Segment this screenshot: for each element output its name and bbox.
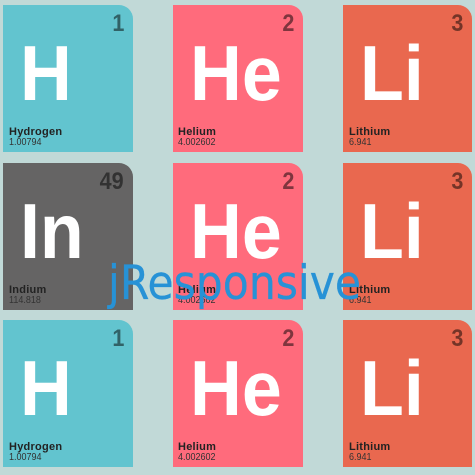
tile: Helium row 1: He bbox=[190, 29, 282, 117]
tile: Helium row 1: 4.002602 bbox=[178, 137, 216, 148]
tile: Hydrogen row 1: H bbox=[20, 29, 72, 117]
tile: Hydrogen row 3: H bbox=[20, 344, 72, 432]
tile: Lithium row 3 bbox=[343, 320, 472, 467]
tile: Helium row 2 bbox=[173, 163, 303, 310]
tile: Helium row 2: Helium bbox=[178, 284, 216, 296]
tile: Lithium row 3: Li bbox=[360, 344, 424, 432]
tile: Lithium row 1 bbox=[343, 5, 472, 152]
tile: Helium row 2: 4.002602 bbox=[178, 295, 216, 306]
tile: Helium row 1: Helium bbox=[178, 126, 216, 138]
tile: Hydrogen row 3 bbox=[3, 320, 133, 467]
tile: Lithium row 2: Li bbox=[360, 187, 424, 275]
tile: Lithium row 1: Li bbox=[360, 29, 424, 117]
tile: Hydrogen row 1: Hydrogen bbox=[9, 126, 62, 138]
tile: Helium row 3: He bbox=[190, 344, 282, 432]
tile: Hydrogen row 3: 1.00794 bbox=[9, 452, 42, 463]
tile: Indium row 2: Indium bbox=[9, 284, 47, 296]
tile: Helium row 2: 2 bbox=[282, 168, 294, 195]
tile: Hydrogen row 1: 1.00794 bbox=[9, 137, 42, 148]
tile: Lithium row 2: 6.941 bbox=[349, 295, 372, 306]
tile: Indium row 2: 49 bbox=[100, 168, 124, 195]
tile: Lithium row 1: Lithium bbox=[349, 126, 390, 138]
tile: Helium row 1: 2 bbox=[282, 10, 294, 37]
tile: Hydrogen row 1: 1 bbox=[112, 10, 124, 37]
tile: Helium row 3: 4.002602 bbox=[178, 452, 216, 463]
tile: Lithium row 3: 3 bbox=[451, 325, 463, 352]
tile: Helium row 2: He bbox=[190, 187, 282, 275]
tile: Lithium row 2: Lithium bbox=[349, 284, 390, 296]
tile: Indium row 2 bbox=[3, 163, 133, 310]
tile: Hydrogen row 3: 1 bbox=[112, 325, 124, 352]
tile: Helium row 3: Helium bbox=[178, 441, 216, 453]
tile: Lithium row 2: 3 bbox=[451, 168, 463, 195]
tile: Helium row 1 bbox=[173, 5, 303, 152]
tile: Hydrogen row 1 bbox=[3, 5, 133, 152]
tile: Helium row 3 bbox=[173, 320, 303, 467]
tile: Lithium row 1: 6.941 bbox=[349, 137, 372, 148]
tile: Hydrogen row 3: Hydrogen bbox=[9, 441, 62, 453]
title: jResponsive: jResponsive bbox=[108, 256, 361, 311]
tile: Lithium row 3: 6.941 bbox=[349, 452, 372, 463]
tile: Lithium row 3: Lithium bbox=[349, 441, 390, 453]
tile: Indium row 2: In bbox=[20, 187, 84, 275]
tile: Indium row 2: 114.818 bbox=[9, 295, 41, 306]
tile: Lithium row 2 bbox=[343, 163, 472, 310]
tile: Helium row 3: 2 bbox=[282, 325, 294, 352]
tile: Lithium row 1: 3 bbox=[451, 10, 463, 37]
